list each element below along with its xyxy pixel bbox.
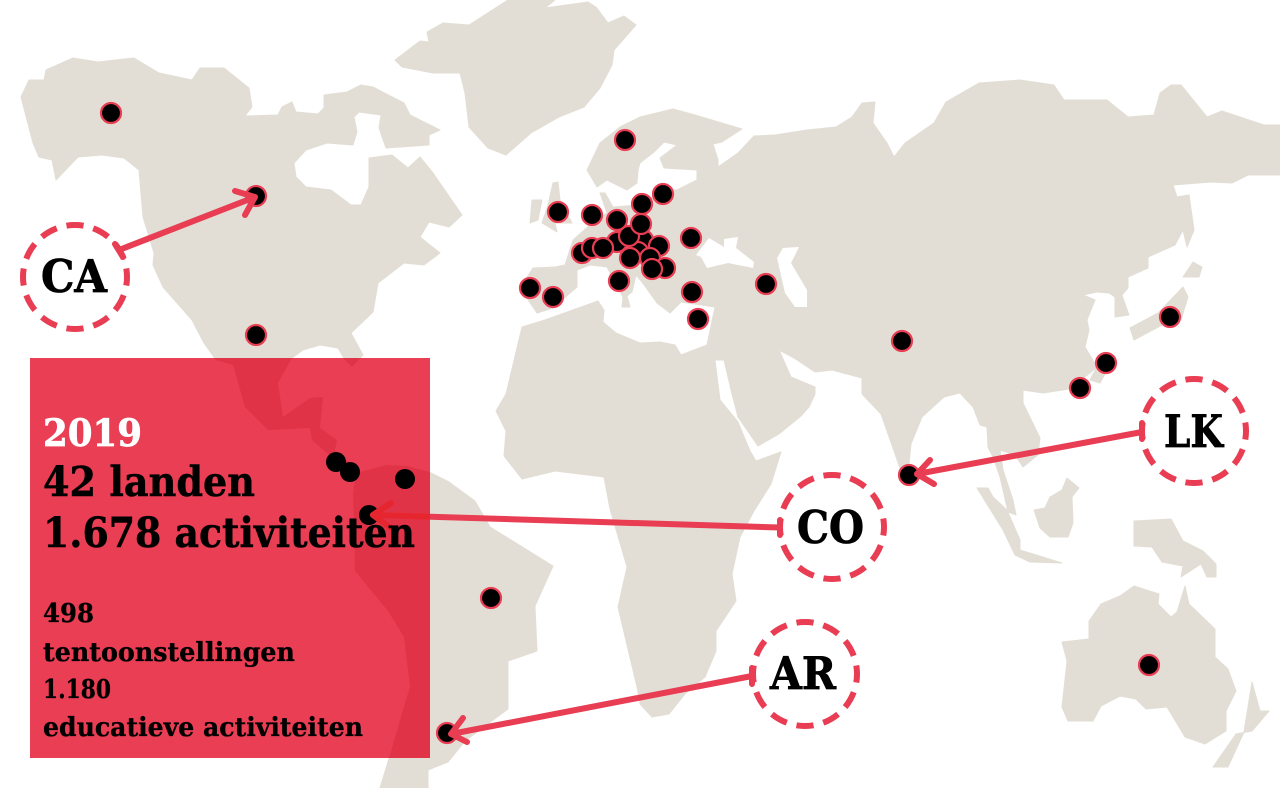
callout: LK: LK: [1164, 405, 1225, 458]
land: Taiwan: [1090, 365, 1110, 383]
land seen through panel: [215, 358, 430, 758]
arrow: AR to Argentina: [451, 668, 752, 742]
land: Honshu: [1130, 287, 1188, 340]
arrow: LK to Sri Lanka: [917, 423, 1142, 484]
callout: CO: CO: [797, 501, 864, 554]
land: Sumatra and Java: [977, 488, 1062, 563]
heading: activities: 1.678 activiteiten: [43, 509, 415, 557]
panel: statistics background: [30, 358, 430, 758]
callout: AR: AR: [769, 647, 837, 700]
land: North and South America: [21, 58, 553, 788]
land: Greenland: [395, 0, 636, 155]
arrow: CO to Colombia: [373, 503, 780, 535]
land: Borneo: [1034, 478, 1079, 537]
callout: CO: [780, 475, 884, 579]
dots seen through panel: [326, 452, 415, 525]
sea: Black Sea: [696, 237, 754, 268]
land: Ireland: [530, 200, 542, 223]
stat: exhibitions label: tentoonstellingen: [43, 638, 295, 668]
callout: CA: CA: [41, 250, 108, 303]
stat: educational count: 1.180: [43, 675, 111, 705]
land: Hokkaido: [1183, 262, 1202, 277]
land: Great Britain: [542, 182, 572, 232]
land: New Zealand: [1213, 682, 1269, 767]
land: Eurasia and Africa: [496, 80, 1280, 717]
arrow: CA to Canada: [115, 191, 255, 257]
stat: exhibitions count: 498: [43, 599, 94, 629]
callout: AR: [753, 622, 857, 726]
sea: Caspian Sea: [777, 247, 807, 307]
text block: statistics: [43, 411, 415, 743]
heading: year: 2019: [43, 411, 142, 455]
callout: LK: [1142, 379, 1246, 483]
land: Australia: [1062, 586, 1236, 744]
location dots outside the panel: [101, 103, 1180, 743]
stat: educational label: educatieve activiteiten: [43, 713, 363, 743]
land: New Guinea: [1134, 519, 1216, 577]
heading: countries: 42 landen: [43, 458, 255, 506]
callout: CA: [23, 225, 127, 329]
